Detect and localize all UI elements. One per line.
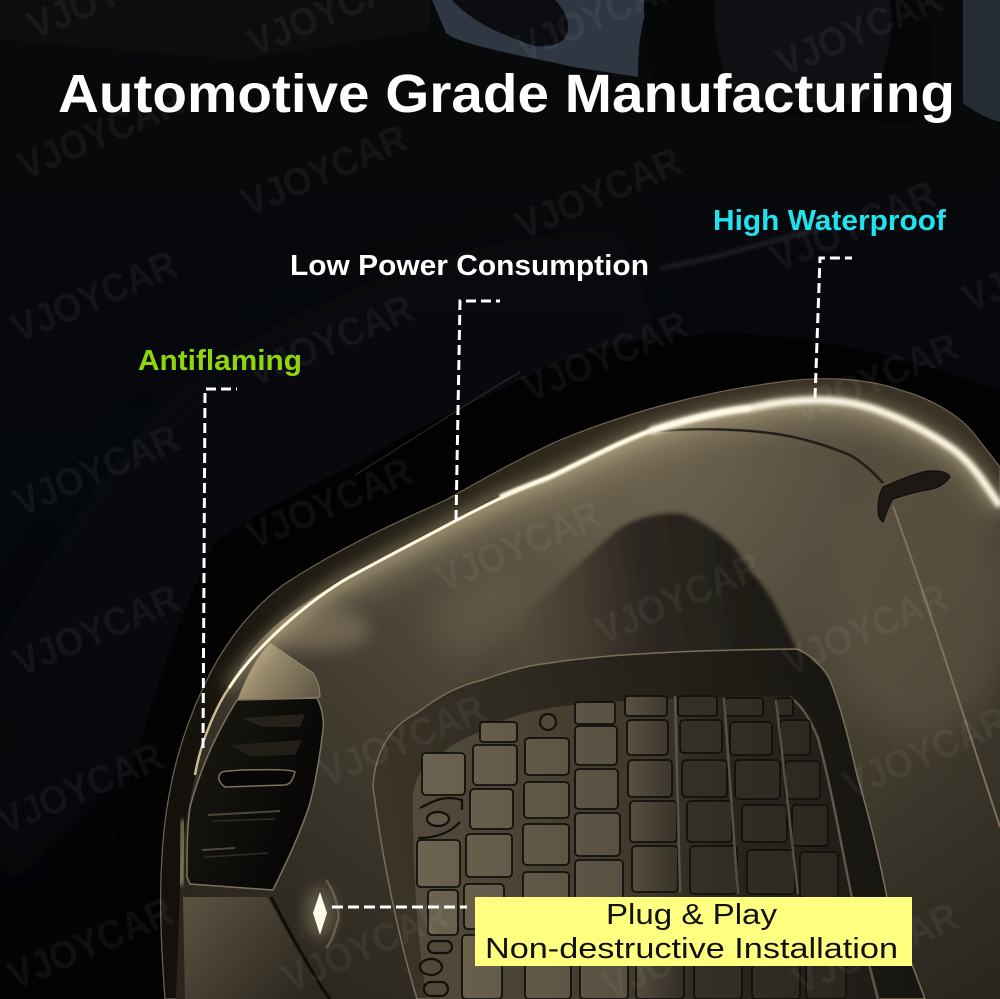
dark arch crease [650, 429, 883, 483]
leader: Plug and Play [332, 906, 467, 908]
label: Low Power Consumption: Low Power Consumption [290, 250, 649, 282]
callout: Plug and Play: Plug & Play [606, 899, 778, 931]
watermarks: VJOYCAR [7, 576, 186, 685]
lower trim panel [183, 897, 325, 999]
soft glow beside hump [442, 589, 504, 642]
watermarks: VJOYCAR [235, 116, 414, 225]
watermarks: VJOYCAR [276, 892, 455, 999]
puddle lamp diamond [306, 880, 338, 948]
watermarks: VJOYCAR [11, 79, 190, 188]
label: High Waterproof: High Waterproof [713, 205, 946, 237]
watermarks: VJOYCAR [240, 449, 419, 558]
wheel well hump [532, 510, 798, 662]
callout: Plug and Play [475, 897, 912, 966]
mat border highlight [790, 697, 878, 999]
trunk handle cutout [878, 471, 950, 522]
watermarks: VJOYCAR [429, 492, 608, 601]
watermarks: VJOYCAR [1, 889, 180, 998]
right side lit area [850, 490, 1000, 738]
label: Antiflaming: Antiflaming [138, 345, 302, 377]
lit pad above vent [237, 643, 320, 702]
parked car at top right [0, 0, 1000, 125]
oval mat detail and pills [418, 714, 556, 996]
right side panel crease [893, 506, 1000, 827]
mat inner field [413, 696, 880, 999]
watermarks: VJOYCAR [7, 416, 186, 525]
leader: Antiflaming [203, 389, 237, 748]
callout: Plug and Play: Non-destructive Installation [485, 933, 898, 965]
fender shadow and reflection [0, 225, 1000, 999]
tile highlights on shaded side [675, 696, 798, 894]
floor mat [373, 649, 925, 999]
interior glow beneath LED strip [250, 400, 1000, 652]
leader: High Waterproof [815, 258, 852, 398]
watermarks: VJOYCAR [764, 172, 943, 281]
watermarks: VJOYCAR [313, 686, 492, 795]
trunk interior [170, 390, 1000, 999]
mat raised border [373, 649, 925, 999]
mat tile grid [417, 696, 846, 999]
watermarks: VJOYCAR [589, 544, 768, 653]
watermarks: VJOYCAR [5, 242, 184, 351]
LED light strip [181, 400, 1000, 885]
trunk rim [161, 379, 1000, 999]
title: Automotive Grade Manufacturing [58, 64, 955, 124]
watermarks: VJOYCAR [241, 286, 420, 395]
vent panel [183, 643, 330, 999]
watermarks: VJOYCAR [509, 139, 688, 248]
watermarks: VJOYCAR [516, 302, 695, 411]
vent slats [202, 714, 305, 857]
vent housing [187, 698, 323, 890]
watermarks: VJOYCAR [786, 324, 965, 433]
dark crease to floor [271, 897, 330, 999]
watermarks: VJOYCAR [776, 575, 955, 684]
leader: Low Power Consumption [456, 301, 500, 520]
